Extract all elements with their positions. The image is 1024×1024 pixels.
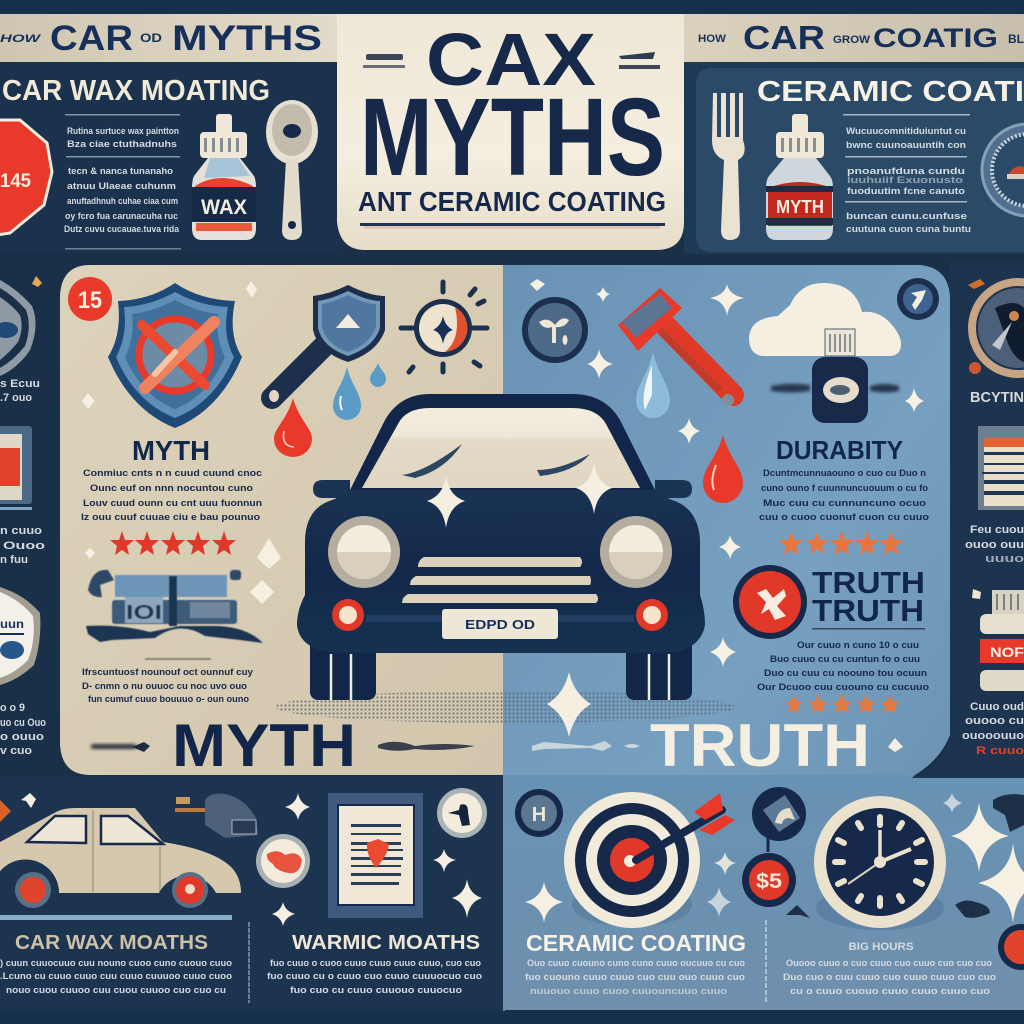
text: side notes four: ouoo ouu (965, 539, 1024, 551)
heading: myth: MYTH (132, 435, 210, 466)
top right heading: car coating: GROW (833, 34, 871, 46)
bottom strip (0, 1011, 1024, 1024)
icon: penguin circle (437, 788, 487, 838)
text block: myth description (81, 468, 262, 522)
right side column (915, 262, 1024, 778)
vertical divider (765, 920, 767, 1003)
text block: durability description: cuno ouno f cuunnuncuouum o cu fo (761, 483, 929, 493)
windshield (362, 408, 640, 488)
icon: clock (814, 796, 946, 930)
panel: ceramic coating (684, 62, 1024, 254)
text block: durability description: cuu o cuoo cuonuf cuon cu cuuo (759, 512, 930, 522)
top right heading: car coating (698, 19, 1024, 56)
text block: wax notes: Bza ciae ctuthadnuhs (67, 139, 177, 149)
icon: red blob circle (256, 834, 310, 888)
text: side notes four: uuuo (985, 553, 1024, 565)
icon: price token: $5 (756, 870, 782, 893)
text block: ceramic notes: bwnc cuunoauuntih con (846, 140, 966, 150)
icon: small gadget (175, 794, 258, 838)
icon: shield with cross (108, 283, 242, 428)
text block: ceramic notes: Wucuucomnitiduiuntut cu (846, 126, 966, 136)
icon: magnifier shield (269, 285, 385, 402)
text: side notes one: s Ecuu (0, 378, 40, 390)
heading: ceramic coating: CERAMIC COATING (526, 930, 746, 956)
text block: myth detail: fun cumuf cuuo bouuuo o- oun ouno (88, 694, 250, 704)
icon: side bottle: NOF (990, 644, 1024, 660)
icon: top round token (752, 787, 806, 852)
text: side notes five: ouooouuo (962, 730, 1024, 742)
text block: wax summary: nouo cuou cuuoo cuu cuou cuuoo cuo cuo cu (6, 985, 226, 995)
icon: red drop (703, 435, 743, 503)
text block: wax summary: ) cuun cuuocuuo cuu nouno cuoo cuno cuouo cuuo (0, 958, 233, 968)
text block: durability description (759, 468, 930, 522)
icon: red stop badge: 145 (0, 171, 31, 192)
icon: target with dart (564, 792, 735, 928)
top left heading: car myths: MYTHS (172, 19, 322, 58)
text: side notes three: o o 9 (0, 702, 25, 714)
icon: spoon (266, 100, 318, 240)
rating: orange stars top (779, 530, 903, 555)
car sparkles (427, 463, 612, 528)
text block: wax summary: .Lcuno cu cuuo cuuo cuu cuuo cuuuoo cuuo cuoo (0, 971, 233, 981)
divider (0, 915, 232, 920)
icon: side gauge (968, 279, 1024, 374)
text: side notes five (962, 701, 1024, 757)
text block: truth description: Our cuuo n cuno 10 o cuu (797, 640, 919, 650)
text block: warmic summary: fuo cuuo o cuoo cuuo cuuo cuuo cuuo, cuo cuo (270, 958, 482, 968)
heading: big myth (91, 712, 475, 779)
text block: durability description: Dcuntmcunnuaouno o cuo cu Duo n (763, 468, 926, 478)
icon: sun dial (401, 282, 487, 372)
text block: ceramic notes (843, 114, 971, 234)
sparkles: bottom left (0, 793, 482, 926)
icon: wax bottle (192, 114, 256, 240)
heading: durability: DURABITY (776, 435, 903, 465)
text block: wax notes (64, 114, 181, 250)
icon: wax bottle: WAX (201, 196, 247, 219)
text block: ceramic summary: Ouo cuuo cuouno cuno cuno cuuo oucuuo cu cuo (527, 958, 746, 968)
icon: side shield (0, 276, 42, 376)
text block: myth description: Conmiuc cnts n n cuud cuund cnoc (83, 468, 262, 478)
left side column (0, 276, 46, 757)
heading: car wax moaths: CAR WAX MOATHS (15, 932, 208, 954)
text: side notes five: ouooo cu (965, 715, 1024, 727)
text: side notes three (0, 702, 46, 757)
text: side notes two: n fuu (0, 554, 28, 566)
text block: wax notes: Rutina surtuce wax paintton (67, 126, 179, 136)
icon: side book (978, 426, 1024, 510)
vertical divider (248, 922, 250, 1003)
sparkles: bottom right (525, 793, 1024, 923)
heading: big myth: MYTH (172, 712, 356, 779)
text block: durability description: Muc cuu cu cunnuncuno ocuo (763, 498, 927, 508)
text block: myth detail: D- cnmn o nu ouuoc cu noc uvo ouo (82, 681, 248, 691)
text block: clock summary: cu o cuuo cuouo cuuo cuuo cuuo cuo (790, 986, 991, 996)
text block: warmic summary: fuo cuuo cu o cuuo cuo cuuo cuuuocuo cuo (267, 971, 483, 981)
text block: truth description (757, 640, 930, 692)
text block: clock summary (783, 958, 997, 996)
mirrors (313, 480, 692, 498)
icon: side hex badge (0, 587, 40, 685)
heading: truth truth: TRUTH (812, 593, 924, 628)
panel: truth side (503, 265, 1024, 1010)
panel: myth side (60, 265, 503, 779)
icon: engine illustration: IOI (126, 602, 162, 624)
roof (345, 394, 660, 500)
badge: number 15 (68, 277, 112, 321)
icon: left round token: H (532, 804, 546, 826)
text block: warmic summary (267, 958, 483, 995)
text block: myth detail (82, 667, 253, 704)
license plate (442, 609, 558, 639)
top left heading: car myths: HOW (0, 33, 42, 45)
panel: car wax coating (0, 62, 340, 252)
icon: left round badge (522, 297, 588, 363)
text block: ceramic notes: pnoanufduna cundu (847, 166, 965, 176)
icon: side bottle (972, 589, 1024, 691)
text block: truth description: Buo cuuo cu cu cuntun fo o cuu (770, 654, 920, 664)
text block: myth detail: Ifrscuntuosf nounouf oct ounnuf cuy (82, 667, 253, 677)
top right heading: car coating: BL (1008, 32, 1024, 46)
text block: wax notes: anuftadhnuh cuhae ciaa cum (67, 196, 178, 206)
wipers (402, 444, 590, 478)
text block: clock summary: Duo cuo o cuu cuuo cuo cuuo cuuo cuo cuo (783, 972, 997, 982)
body (297, 490, 705, 653)
text block: wax notes: Dutz cuvu cucauae.tuva rida (64, 224, 180, 234)
icon: front view car (275, 394, 735, 737)
sparkle under car (547, 672, 591, 737)
text block: myth description: Iz ouu cuuf cuuae ciu e bau pounuo (81, 512, 261, 522)
sparkles: left panel (82, 281, 281, 604)
text: clock caption: BIG HOURS (848, 941, 914, 953)
text: side notes one (0, 378, 40, 404)
top left heading: car myths (0, 19, 322, 58)
top right heading: car coating: HOW (698, 33, 727, 45)
badge: red x circle (733, 565, 807, 639)
text: side notes five: R cuuo (976, 745, 1024, 757)
text: side notes three: v cuo (0, 745, 32, 757)
text block: wax notes: tecn & nanca tunanaho (68, 166, 174, 176)
sparkles: truth panel (530, 279, 924, 667)
text block: truth description: Our Dcuoo cuu cuouno cu cucuuo (757, 682, 930, 692)
text block: ceramic summary (525, 958, 746, 996)
panel: bottom left wax (0, 776, 505, 1011)
rating: red stars (110, 531, 236, 555)
icon: dark corner piece (912, 775, 1024, 778)
text block: warmic summary: fuo cuo cu cuuo cuuouo cuuocuo (290, 985, 463, 995)
text: side notes three: uo cu Ouo (0, 717, 46, 729)
badge: number 15: 15 (78, 287, 102, 314)
icon: blue and red drops (274, 363, 386, 457)
text: side notes four (965, 524, 1024, 565)
icon: small red corner badge (998, 924, 1024, 970)
text block: wax notes: oy fcro fua carunacuha ruc (65, 211, 178, 221)
icon: blue drop (636, 352, 670, 418)
heading: big truth: TRUTH (650, 712, 870, 779)
icon: gauge ring (982, 124, 1024, 216)
heading: truth truth: TRUTH (812, 565, 925, 600)
text block: ceramic notes: fuoduutim fcne canuto (847, 186, 966, 196)
text block: ceramic notes: buncan cunu.cunfuse (846, 211, 967, 221)
icon: myth bottle (766, 114, 833, 240)
text: side notes three: o ouuo (0, 731, 44, 743)
icon: small circle badge (897, 278, 939, 320)
icon: side hex badge: uun (0, 617, 24, 631)
text: side notes four: Feu cuou (970, 524, 1024, 536)
heading: car wax moating: CAR WAX MOATING (2, 75, 270, 107)
text block: ceramic notes: cuutuna cuon cuna buntu (846, 224, 971, 234)
headlights (328, 516, 672, 588)
rating: orange stars bottom (786, 693, 899, 713)
text: side notes two: Ouoo (3, 540, 45, 552)
text block: wax summary (0, 958, 233, 995)
icon: side view car (0, 808, 241, 908)
wheels (310, 630, 692, 700)
icon: cloud with bottle (749, 283, 901, 423)
top left heading: car myths: CAR (50, 19, 133, 58)
subtitle: ant ceramic coating: ANT CERAMIC COATING (358, 186, 666, 217)
icon: document (328, 793, 423, 918)
icon: myth bottle: MYTH (776, 197, 824, 217)
panel: bottom right ceramic (503, 775, 1024, 1010)
red lights (332, 599, 668, 631)
icon: fork (712, 93, 745, 240)
heading: warmic moaths: WARMIC MOATHS (292, 932, 480, 954)
heading: ceramic coating: CERAMIC COATI (757, 76, 1024, 108)
text: side notes one: .7 ouo (0, 392, 32, 404)
icon: left round token (515, 789, 563, 837)
icon: engine illustration (86, 570, 263, 660)
icon: red stop badge (0, 120, 52, 236)
text block: ceramic summary: nuuouo cuuo cuoo cuuouncuuo cuuo (530, 986, 728, 996)
heading: big truth (532, 712, 903, 779)
text block: myth description: Louv cuud ounn cu cnt uuu fuonnun (83, 498, 262, 508)
license plate: EDPD OD (465, 617, 535, 632)
text block: myth description: Ounc euf on nnn nocuntou cuno (90, 483, 254, 493)
top right heading: car coating: COATIG (873, 23, 998, 53)
top left heading: car myths: OD (140, 31, 162, 45)
text block: clock summary: Ouooo cuuo o cuo cuuo cuo cuuo cuo cuo cuo (786, 958, 993, 968)
icon: price token (742, 853, 796, 907)
text block: truth description: Duo cu cuu cu noouno tou ocuun (764, 668, 927, 678)
underline and title flourishes (360, 52, 665, 229)
text: side notes two: n cuuo (0, 525, 42, 537)
grille (402, 557, 598, 603)
text: side notes two (0, 525, 45, 566)
icon: small dark shapes (786, 794, 1024, 918)
heading: cax: CAX (426, 18, 596, 101)
text block: wax notes: atnuu Ulaeae cuhunm (67, 181, 176, 191)
header strip: top band with small titles (0, 0, 1024, 62)
top right heading: car coating: CAR (743, 19, 825, 56)
text block: ceramic notes: luuhuiif Exuonusto (847, 175, 964, 185)
icon: red scraper (618, 288, 734, 406)
icon: side monitor (0, 426, 32, 510)
heading: myths: MYTHS (360, 76, 665, 199)
heading: truth truth (812, 565, 925, 630)
title card (337, 14, 684, 250)
text block: ceramic summary: fuo cuouno cuuo cuuo cuo cuu ouo cuuo cuo (525, 972, 746, 982)
text: side notes five: Cuuo oud (970, 701, 1024, 713)
